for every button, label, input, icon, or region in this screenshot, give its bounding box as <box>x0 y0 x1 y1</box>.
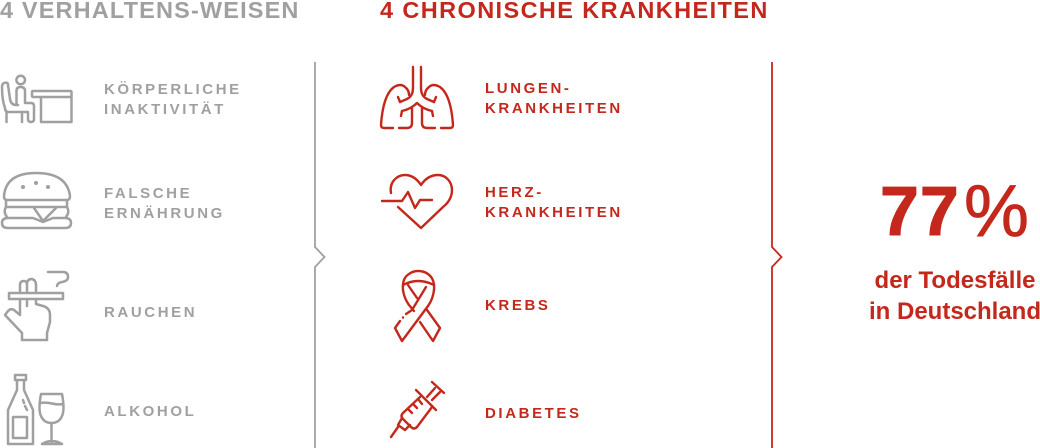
icon: lungs <box>381 67 453 128</box>
icon: syringe <box>391 382 444 437</box>
icon: heart with pulse <box>382 175 452 228</box>
icon: burger <box>2 173 71 228</box>
label: lung diseases: LUNGEN- <box>485 80 572 97</box>
label: cancer: KREBS <box>485 297 551 314</box>
label: diabetes: DIABETES <box>485 405 582 422</box>
icon: hand with cigarette <box>5 272 68 340</box>
label: wrong diet: ERNÄHRUNG <box>104 205 225 222</box>
icon: person sitting at desk <box>2 76 72 122</box>
caption: share of deaths in Germany: in Deutschland <box>869 298 1040 325</box>
icon: ribbon <box>395 271 440 341</box>
label: heart diseases: KRANKHEITEN <box>485 204 623 221</box>
statistic: 77 percent <box>880 171 1029 252</box>
caption: share of deaths in Germany: der Todesfälle <box>875 267 1035 294</box>
statistic: 77 percent: 77 <box>880 172 960 250</box>
label: wrong diet: FALSCHE <box>104 185 192 202</box>
icon: bottle and wine glass <box>8 375 64 444</box>
label: physical inactivity: INAKTIVITÄT <box>104 101 226 118</box>
label: lung diseases: KRANKHEITEN <box>485 100 623 117</box>
label: alcohol: ALKOHOL <box>104 403 196 420</box>
label: smoking: RAUCHEN <box>104 304 197 321</box>
icon: burger sesame seeds <box>21 181 50 189</box>
label: physical inactivity: KÖRPERLICHE <box>104 81 242 98</box>
label: heart diseases: HERZ- <box>485 184 544 201</box>
divider arrow: red <box>772 62 782 448</box>
divider arrow: grey <box>315 62 324 448</box>
statistic: 77 percent: % <box>964 171 1029 252</box>
